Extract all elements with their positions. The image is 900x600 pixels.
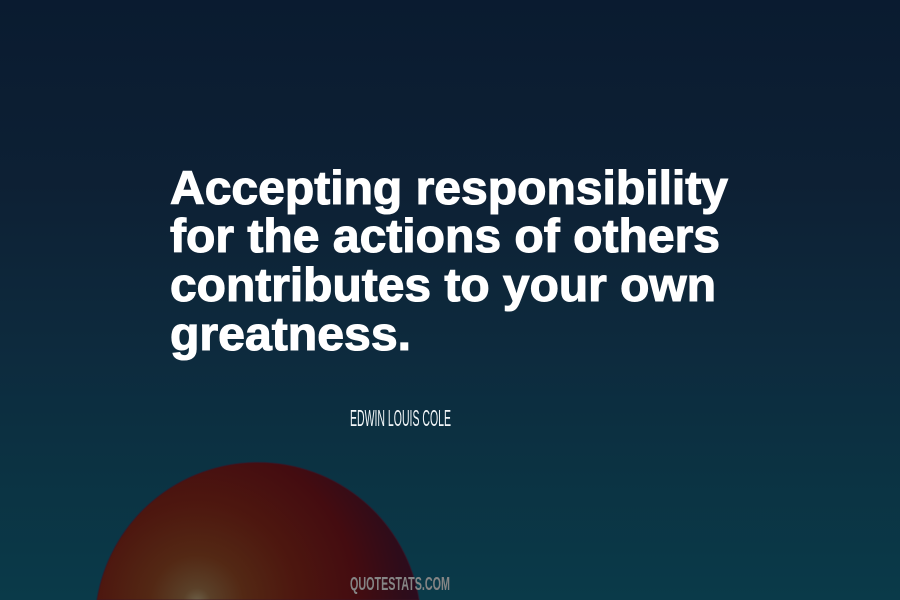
quote text: for the actions of others [170, 209, 720, 262]
quote text: contributes to your own [170, 258, 716, 311]
balloon sphere [97, 462, 419, 600]
quote text [170, 161, 728, 360]
quote text: Accepting responsibility [170, 161, 728, 214]
quote poster: EDWIN LOUIS COLE [350, 405, 451, 431]
quote text: greatness. [170, 307, 411, 360]
watermark: QUOTESTATS.COM [350, 574, 450, 594]
